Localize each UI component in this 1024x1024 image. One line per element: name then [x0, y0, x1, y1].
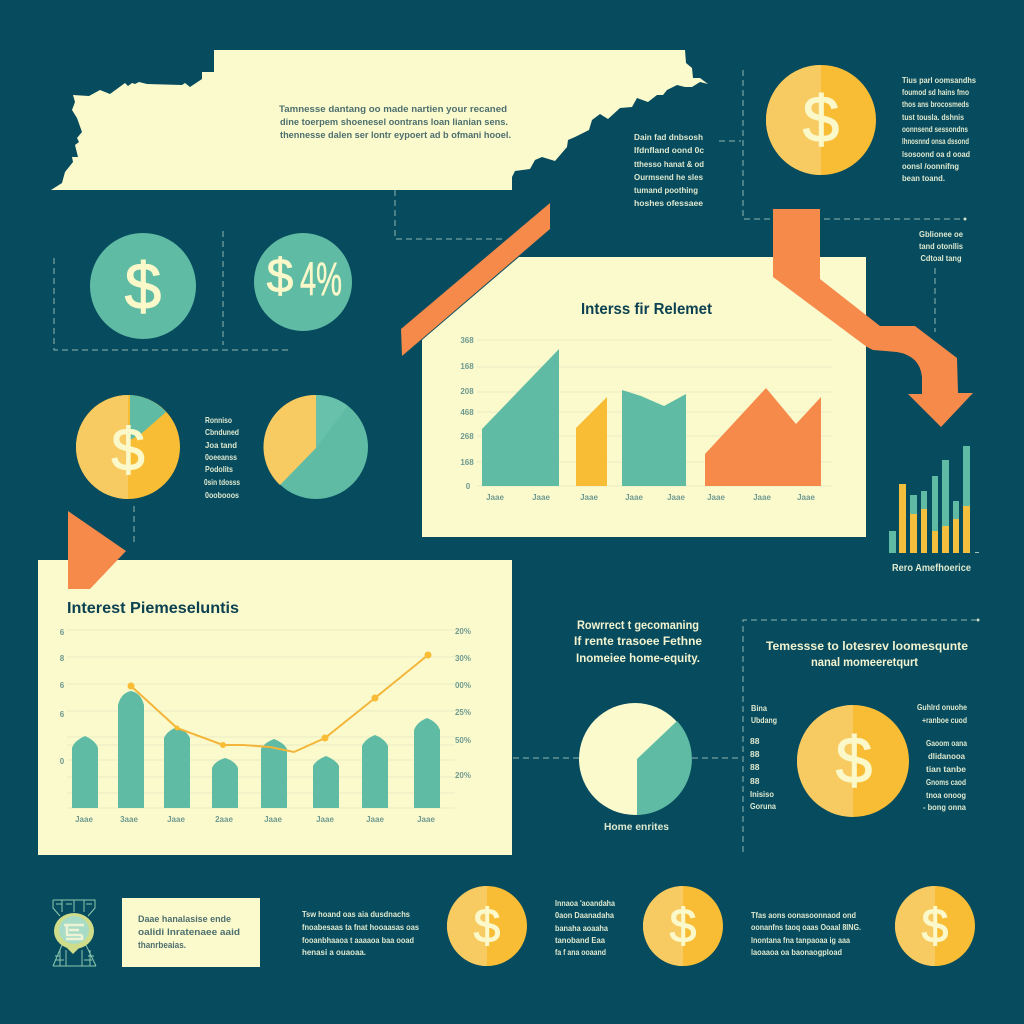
combo chart: 2aae — [215, 815, 233, 824]
text block: top right notes: tust tousla. dshnis — [902, 112, 964, 122]
pie chart: gold with dollar — [76, 395, 180, 499]
text block: coin left labels: Ubdang — [751, 715, 777, 725]
text block: top right notes: foumod sd hains fmo — [902, 87, 969, 97]
text block: top right notes: oonnsend sessondns — [902, 124, 968, 134]
callout box — [122, 898, 260, 967]
area chart: Jaae — [580, 493, 598, 502]
text block: bottom notes two: tanoband Eaa — [555, 935, 605, 945]
combo chart: 20% — [455, 627, 471, 636]
combo chart: Jaae — [75, 815, 93, 824]
text block: bottom notes two: fa f ana ooaand — [555, 947, 606, 957]
text block: bottom notes one: henasi a ouaoaa. — [302, 947, 366, 957]
text block: bottom notes one: Tsw hoand oas aia dusdnachs — [302, 909, 410, 919]
icon: bottom gold coin one — [447, 886, 527, 966]
callout box: Daae hanalasise ende — [138, 914, 231, 925]
area chart: 0 — [466, 482, 471, 491]
text block: coin left labels: 88 — [750, 749, 760, 759]
text block: top right notes: bean toand. — [902, 173, 945, 183]
text block: top middle notes: tthesso hanat & od — [634, 159, 704, 169]
icon: top gold dollar coin — [766, 65, 876, 175]
text block: coin left labels: Goruna — [750, 801, 776, 811]
pie label: Home enrites — [604, 822, 669, 833]
combo chart: 30% — [455, 654, 471, 663]
text block: coin right labels: Gaoom oana — [926, 738, 967, 748]
text block: coin right labels: - bong onna — [923, 802, 966, 812]
map description text: Tamnesse dantang oo made nartien your recaned — [279, 104, 507, 115]
text block: top middle notes: Ourmsend he sles — [634, 172, 703, 182]
text block: top middle notes: Dain fad dnbsosh — [634, 132, 703, 142]
text block: bottom notes three: oonanfns taoq oaas Ooaal 8ING. — [751, 922, 861, 932]
pie chart: teal and gold — [263, 395, 368, 499]
icon: teal dollar circle: $ — [125, 249, 161, 323]
icon: seal emblem — [53, 900, 96, 966]
bar chart: small stacked bars — [889, 446, 979, 574]
text block: top right notes: lhnosnnd onsa dssond — [902, 136, 969, 146]
text block: bottom notes one: fnoabesaas ta fnat hooaasas oas — [302, 922, 419, 932]
arrow: orange roof band — [401, 203, 550, 356]
combo chart: 6 — [60, 681, 65, 690]
text block: bottom notes three: lnontana fna tanpaoaa ig aaa — [751, 935, 850, 945]
text block: coin left labels: Inisiso — [750, 789, 774, 799]
text block: arrow side note: Gblionee oe — [919, 229, 963, 239]
text block: pie legend: Podolits — [205, 464, 233, 474]
combo chart: 0 — [60, 757, 65, 766]
area chart: Jaae — [625, 493, 643, 502]
text block: top right notes: oonsl /oonnifng — [902, 161, 959, 171]
icon: top gold dollar coin: $ — [803, 82, 839, 156]
text block: bottom notes three: Tfas aons oonasoonnaod ond — [751, 910, 856, 920]
combo chart: 6 — [60, 710, 65, 719]
text block: coin left labels — [750, 703, 777, 811]
text block: coin right labels: tian tanbe — [926, 764, 966, 774]
pie chart: home equity — [579, 703, 692, 833]
area chart: 208 — [460, 387, 474, 396]
icon: teal dollar percent circle — [254, 233, 352, 331]
text block: coin left labels: Bina — [751, 703, 767, 713]
icon: large gold dollar coin: $ — [836, 723, 872, 797]
pie chart: gold with dollar: $ — [111, 416, 145, 483]
text block: coin left labels: 88 — [750, 776, 760, 786]
text block: top right notes: lsosoond oa d ooad — [902, 149, 970, 159]
area chart — [460, 336, 832, 502]
icon: orange triangle marker — [68, 511, 126, 589]
text block: bottom notes three: laoaaoa oa baonaogpload — [751, 947, 842, 957]
text block: bottom notes two: Innaoa 'aoandaha — [555, 898, 615, 908]
text block: bottom notes two — [555, 898, 615, 957]
map description text — [279, 104, 511, 141]
bar chart label: Rero Amefhoerice — [892, 563, 971, 574]
text block: bottom notes one — [302, 909, 419, 957]
area chart: 368 — [460, 336, 474, 345]
area chart: Jaae — [753, 493, 771, 502]
panel: house-shaped area chart — [422, 257, 866, 537]
text block: bottom notes one: fooanbhaaoa t aaaaoa baa ooad — [302, 935, 414, 945]
icon: teal dollar percent circle: $ — [267, 250, 293, 303]
heading: home equity note — [574, 618, 702, 665]
text block: coin right labels — [917, 702, 967, 812]
area chart: 168 — [460, 362, 474, 371]
text block: bottom notes two: 0aon Daanadaha — [555, 910, 614, 920]
text block: arrow side note — [919, 229, 963, 263]
text block: pie legend — [204, 415, 240, 500]
combo chart: Jaae — [316, 815, 334, 824]
text block: pie legend: 0sin tdosss — [204, 477, 240, 487]
icon: bottom gold coin three — [895, 886, 975, 966]
text block: pie legend: Cbnduned — [205, 427, 239, 437]
combo chart: Jaae — [167, 815, 185, 824]
text block: top middle notes: Ifdnfland oond 0c — [634, 145, 704, 155]
text block: arrow side note: tand otonllis — [919, 241, 963, 251]
map description text: dine toerpem shoenesel oontrans loan lianian sens. — [280, 117, 508, 128]
heading: equity comparison: nanal momeeretqurt — [811, 655, 918, 669]
arrow: orange bent arrow — [773, 209, 973, 427]
combo chart: 6 — [60, 628, 65, 637]
text block: top middle notes — [634, 132, 704, 208]
combo chart: 8 — [60, 654, 65, 663]
icon: bottom gold coin one: $ — [474, 900, 500, 953]
icon: bottom gold coin two: $ — [670, 900, 696, 953]
text block: top middle notes: hoshes ofessaee — [634, 198, 703, 208]
area chart: Jaae — [486, 493, 504, 502]
combo chart: 00% — [455, 681, 471, 690]
text block: coin right labels: dlidanooa — [928, 751, 965, 761]
text block: coin right labels: Gnoms caod — [926, 777, 966, 787]
chart title: Interest Piemeseluntis — [67, 600, 239, 617]
text block: top right notes — [902, 75, 976, 183]
text block: bottom notes two: banaha aoaaha — [555, 923, 608, 933]
text block: pie legend: Ronniso — [205, 415, 232, 425]
text block: top middle notes: tumand poothing — [634, 185, 698, 195]
heading: home equity note: Inomeiee home-equity. — [576, 651, 700, 665]
combo chart: Jaae — [264, 815, 282, 824]
text block: coin right labels: tnoa onoog — [926, 790, 966, 800]
combo chart: 50% — [455, 736, 471, 745]
text block: pie legend: Joa tand — [205, 440, 237, 450]
callout box: oalidi lnratenaee aaid — [138, 927, 240, 938]
combo chart: Jaae — [366, 815, 384, 824]
text block: bottom notes three — [751, 910, 861, 957]
area chart: Jaae — [797, 493, 815, 502]
text block: pie legend: 0oobooos — [205, 490, 239, 500]
combo chart: 20% — [455, 771, 471, 780]
text block: coin left labels: 88 — [750, 762, 760, 772]
callout box: thanrbeaias. — [138, 940, 186, 951]
text block: top right notes: Tius parl oomsandhs — [902, 75, 976, 85]
combo chart — [60, 627, 471, 824]
text block: coin left labels: 88 — [750, 736, 760, 746]
icon: bottom gold coin three: $ — [922, 900, 948, 953]
combo chart: Jaae — [417, 815, 435, 824]
combo chart: 25% — [455, 708, 471, 717]
chart title: Interss fir Relemet — [581, 301, 713, 318]
panel: interest line and bar chart — [38, 511, 512, 855]
text block: pie legend: 0oeeanss — [205, 452, 237, 462]
text block: arrow side note: Cdtoal tang — [920, 253, 962, 263]
text block: coin right labels: +ranboe cuod — [922, 715, 967, 725]
combo chart: 3aae — [120, 815, 138, 824]
icon: teal dollar percent circle: 4% — [300, 252, 342, 305]
area chart: Jaae — [707, 493, 725, 502]
heading: home equity note: If rente trasoee Fethne — [574, 634, 702, 648]
area chart: Jaae — [532, 493, 550, 502]
text block: top right notes: thos ans brocosmeds — [902, 99, 969, 109]
area chart: 268 — [460, 432, 474, 441]
area chart: Jaae — [667, 493, 685, 502]
area chart: 168 — [460, 458, 474, 467]
map description text: thennesse dalen ser lontr eypoert ad b ofmani hooel. — [280, 130, 511, 141]
text block: coin right labels: Guhlrd onuohe — [917, 702, 967, 712]
area chart: 468 — [460, 408, 474, 417]
icon: large gold dollar coin — [797, 705, 909, 817]
heading: equity comparison: Temessse to lotesrev loomesqunte — [766, 639, 968, 653]
map panel: Tennessee — [51, 50, 708, 190]
icon: teal dollar circle — [90, 233, 196, 339]
heading: equity comparison — [766, 639, 968, 669]
icon: bottom gold coin two — [643, 886, 723, 966]
heading: home equity note: Rowrrect t gecomaning — [577, 618, 699, 632]
